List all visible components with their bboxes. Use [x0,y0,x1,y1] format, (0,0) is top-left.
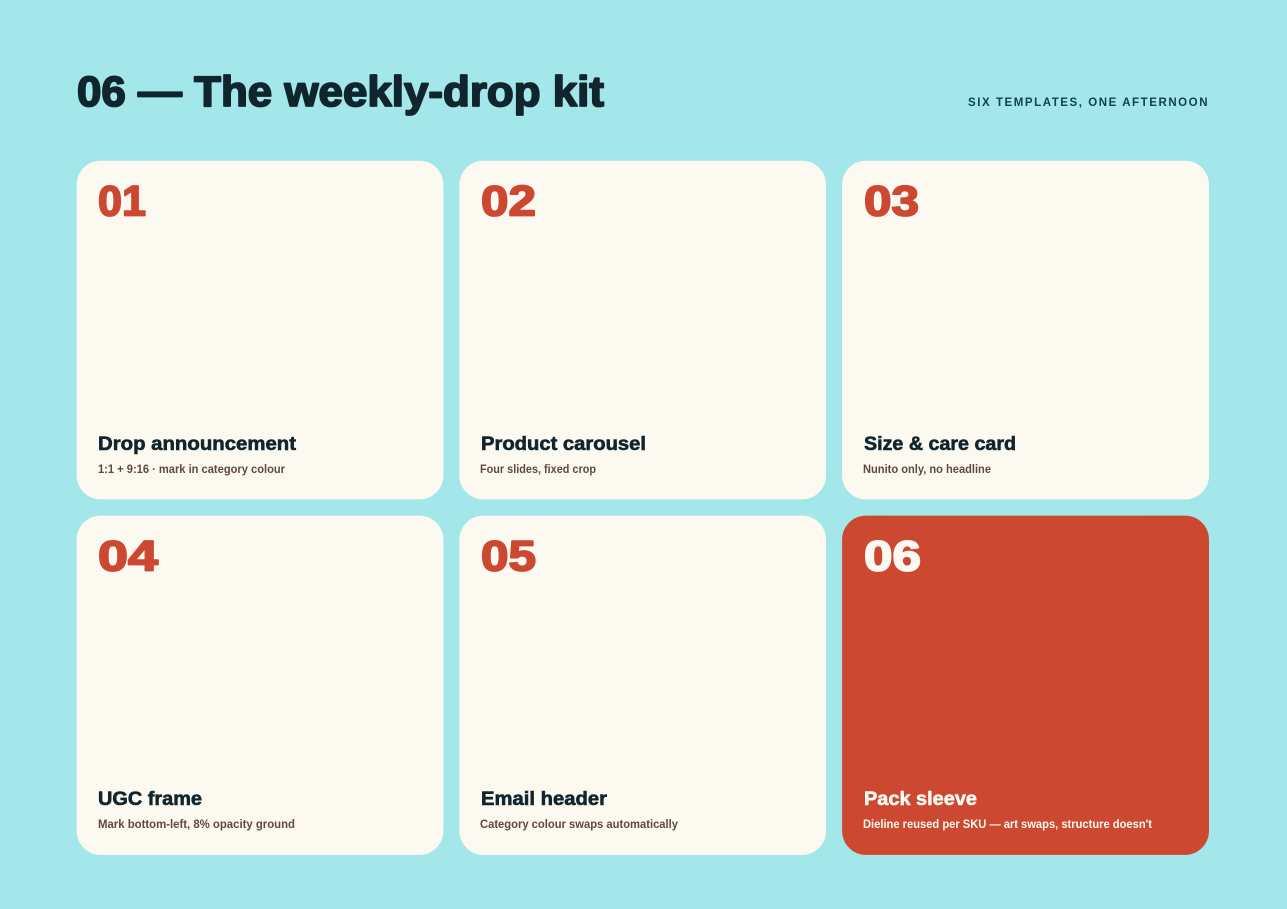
card 01 description: 1:1 + 9:16 · mark in category colour [98,464,286,476]
card 06 description: Dieline reused per SKU — art swaps, structure doesn't [863,819,1152,831]
title: 06 — The weekly-drop kit [77,68,604,116]
card 05 number: 05 [481,532,536,580]
panel: card 02 product carousel [459,161,826,499]
card 01 number: 01 [98,178,146,226]
panel: card 06 pack sleeve [842,516,1209,855]
card 03 number: 03 [864,178,919,226]
card 03 description: Nunito only, no headline [863,464,991,476]
card 02 description: Four slides, fixed crop [480,464,596,476]
card 01 heading: Drop announcement [98,433,297,455]
card 06 number: 06 [864,532,921,580]
card 05 heading: Email header [481,788,607,810]
card 04 description: Mark bottom-left, 8% opacity ground [98,819,295,831]
panel: card 01 drop announcement [77,161,443,499]
tagline: SIX TEMPLATES, ONE AFTERNOON [968,97,1208,109]
card 06 heading: Pack sleeve [864,788,977,810]
card 03 heading: Size & care card [864,433,1016,455]
card 04 number: 04 [98,532,158,580]
card 04 heading: UGC frame [98,788,202,810]
panel: card 04 UGC frame [77,516,443,855]
card 05 description: Category colour swaps automatically [480,819,679,831]
panel: card 03 size and care card [842,161,1209,499]
card 02 heading: Product carousel [481,433,646,455]
panel: card 05 email header [459,516,826,855]
card 02 number: 02 [481,178,536,226]
